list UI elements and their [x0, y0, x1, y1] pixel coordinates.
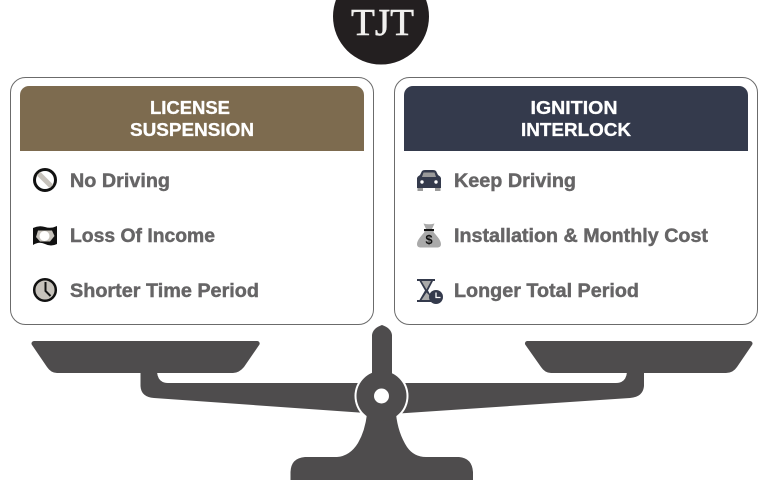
icon: clock [34, 279, 56, 301]
heading: ignition interlock: INTERLOCK [521, 119, 632, 140]
heading: ignition interlock [404, 86, 748, 151]
text: shorter time period: Shorter Time Period [70, 280, 259, 302]
heading: license suspension: LICENSE [150, 97, 230, 118]
panel: license suspension [10, 78, 374, 324]
white ring around hub [354, 369, 408, 423]
text: longer total period: Longer Total Period [454, 280, 639, 302]
icon: hourglass with clock [417, 279, 443, 304]
icon: money bag [417, 224, 441, 248]
heading: license suspension: SUSPENSION [130, 119, 254, 140]
left pan and beam [32, 341, 380, 414]
text: keep driving: Keep Driving [454, 170, 576, 192]
panel: ignition interlock [394, 78, 758, 324]
heading: license suspension [20, 86, 364, 151]
heading: ignition interlock: IGNITION [530, 97, 618, 118]
icon: no driving [34, 170, 56, 190]
text: installation and monthly cost: Installation & Monthly Cost [454, 225, 708, 247]
balance scale [32, 325, 753, 480]
icon: car [417, 170, 441, 191]
text: no driving: No Driving [70, 170, 170, 192]
icon: money bag: $ [425, 232, 433, 247]
text: loss of income: Loss Of Income [70, 225, 215, 247]
fulcrum post and base [290, 325, 473, 480]
icon: loss of income [33, 226, 57, 246]
right pan and beam [384, 341, 753, 414]
logo badge [333, 0, 429, 64]
logo badge: TJT [351, 2, 414, 44]
